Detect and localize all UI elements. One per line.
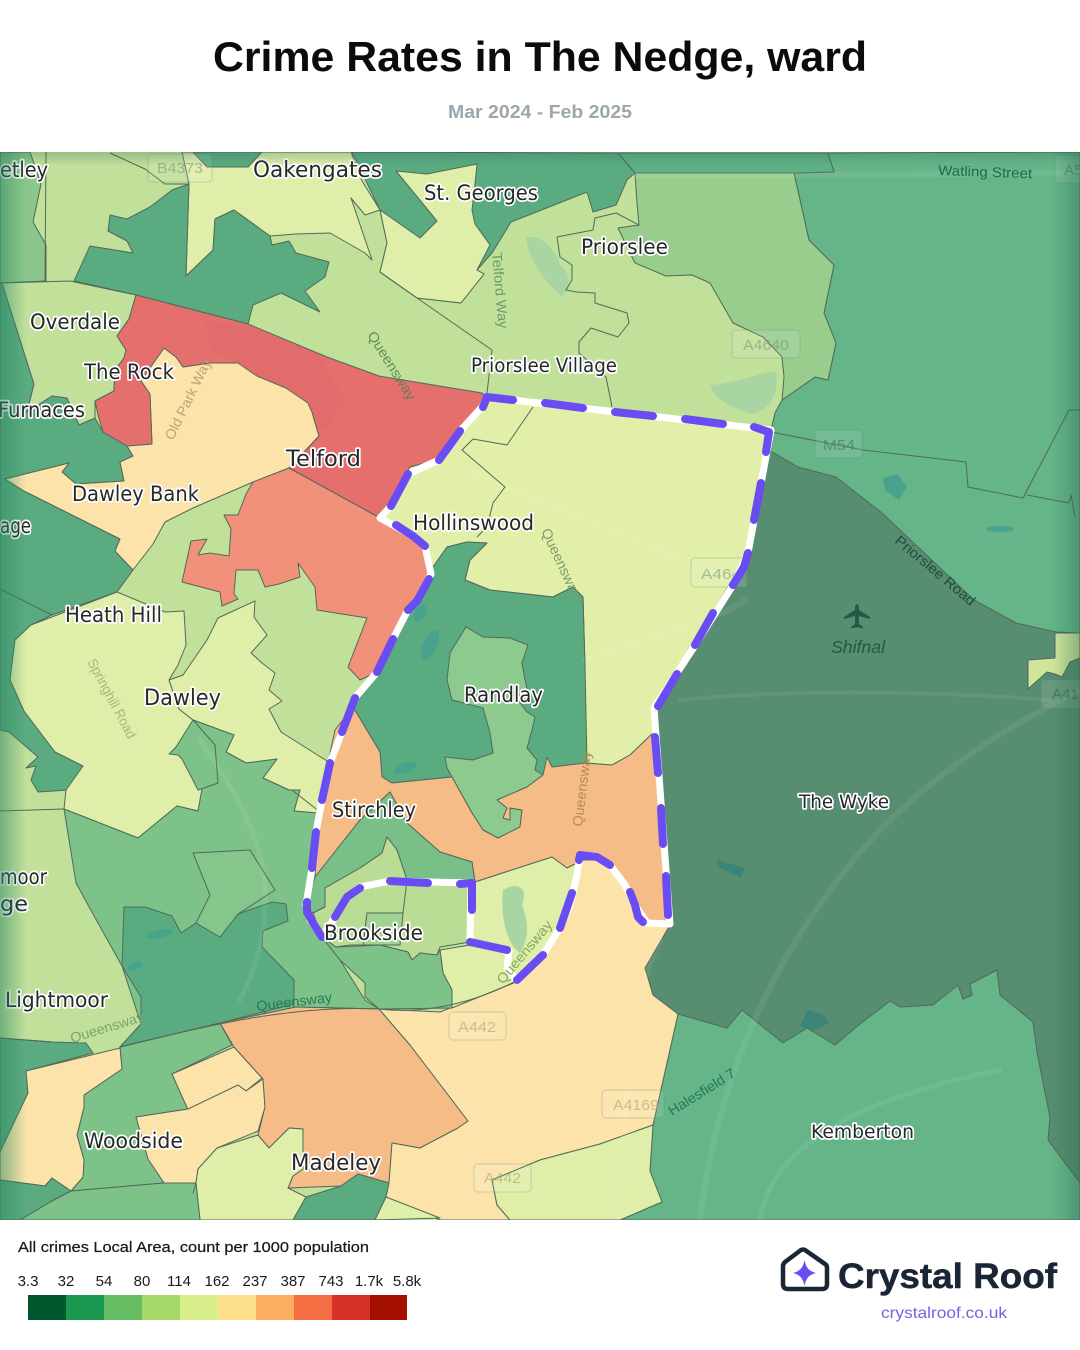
place names	[0, 158, 914, 1176]
place names: Overdale	[30, 310, 120, 334]
area: lower-left green	[0, 1038, 93, 1152]
place names: Lightmoor	[5, 988, 108, 1012]
area: The Wyke dark green	[645, 450, 1080, 1183]
legend colour scale	[28, 1295, 407, 1320]
legend values	[18, 1273, 422, 1290]
road shield labels: A41	[1052, 686, 1079, 703]
legend values: 80	[134, 1273, 150, 1290]
area: north dark-green St Georges	[352, 152, 635, 303]
area: top-left green strip	[0, 152, 46, 283]
place names: age	[0, 514, 31, 538]
road names: Old Park Way	[161, 356, 214, 442]
place names: Furnaces	[0, 398, 85, 422]
legend values: 32	[58, 1273, 74, 1290]
road shield labels: A4169	[613, 1097, 659, 1114]
place names: Hollinswood	[413, 511, 534, 535]
area: Madeley south dark green	[293, 1174, 389, 1220]
area: cream C	[136, 1079, 265, 1183]
place names: Dawley	[144, 685, 221, 711]
area: Dawley west yellow	[10, 592, 205, 838]
area: cream west	[0, 1048, 122, 1191]
legend values: 387	[280, 1273, 306, 1290]
place names: Brookside	[324, 921, 423, 945]
place names: ge	[0, 892, 28, 916]
area: Brookside small patch	[363, 913, 403, 945]
area: yellow patch near A41	[1028, 633, 1080, 689]
road network overlay	[180, 172, 1080, 1220]
road names: Watling Street	[938, 162, 1033, 181]
area: bottom-left greens	[20, 1183, 200, 1220]
road shield labels: B4373	[157, 160, 203, 177]
legend values: 237	[242, 1273, 268, 1290]
place names: etley	[0, 158, 48, 182]
area: Madeley orange	[220, 1007, 468, 1188]
lakes and water bodies	[502, 237, 777, 953]
road names: Queensway	[493, 917, 555, 987]
area: salmon Hollinswood west	[182, 468, 432, 680]
place names: Shifnal	[831, 637, 886, 657]
map edge vignette	[0, 152, 1080, 1220]
place names: Telford	[285, 446, 361, 472]
area: St Georges yellow	[380, 164, 490, 303]
road names: Priorslee Road	[892, 532, 979, 609]
area: red darker park	[237, 362, 313, 413]
place names: Stirchley	[332, 798, 416, 822]
area: Madeley south yellow	[196, 1128, 306, 1220]
area: Nedge south yellow	[440, 857, 577, 1008]
area: Randlay green	[353, 542, 587, 783]
road shield labels: A464	[701, 566, 741, 583]
legend values: 743	[318, 1273, 344, 1290]
legend values: 5.8k	[393, 1273, 422, 1290]
legend	[18, 1239, 422, 1320]
area: cream B	[172, 1047, 262, 1112]
area: Brookside pale green	[313, 837, 472, 960]
ward boundary: white outline	[306, 397, 771, 981]
ward boundary: purple dashes	[307, 397, 769, 980]
area: Dawley east yellow	[169, 601, 327, 813]
choropleth map	[0, 152, 1080, 1220]
road names: Queensway	[364, 328, 419, 403]
road names: Queensway	[569, 750, 594, 827]
area: Woodside mid green	[71, 1023, 232, 1191]
teal ponds	[126, 474, 1014, 1031]
area: south of Brookside green	[322, 937, 452, 1009]
place names: Priorslee	[581, 235, 668, 259]
area: top small green	[193, 152, 262, 167]
area: red Telford town centre	[95, 295, 487, 518]
area: south cream	[379, 860, 678, 1220]
road names: Springhill Road	[84, 656, 140, 741]
area: bottom yellow right	[492, 1125, 662, 1220]
area: Randlay lighter patch	[445, 627, 543, 838]
boundary lines	[0, 152, 1080, 1193]
road names: Queensway	[68, 1008, 146, 1046]
legend values: 1.7k	[355, 1273, 384, 1290]
logo: Crystal Roof	[783, 1250, 1057, 1322]
area: Hollinswood / Nedge yellow	[380, 397, 771, 765]
place names: The Wyke	[798, 791, 889, 813]
road names: Telford Way	[489, 252, 512, 329]
legend values: 54	[96, 1273, 112, 1290]
place names: Madeley	[291, 1150, 381, 1176]
wordmark: Crystal Roof	[838, 1257, 1057, 1296]
road shield labels: A442	[458, 1019, 496, 1036]
place names: Kemberton	[811, 1121, 914, 1143]
place names: moor	[0, 865, 47, 889]
icon: airport plane	[844, 604, 870, 628]
road shield labels: M54	[823, 437, 855, 454]
title: Crime Rates in The Nedge, ward	[213, 33, 867, 80]
area: eastern green farmland	[620, 152, 1080, 1220]
area: Priorslee east	[618, 173, 836, 400]
website: crystalroof.co.uk	[881, 1305, 1008, 1322]
road shield labels: A4640	[743, 337, 789, 354]
legend values: 114	[167, 1273, 191, 1290]
place names: The Rock	[83, 360, 175, 384]
legend values: 3.3	[18, 1273, 38, 1290]
area: mid green inner patch	[193, 850, 275, 937]
area: Dawley Bank cream	[5, 348, 319, 570]
area: bottom cream-yellow centre	[375, 1197, 440, 1220]
place names: Randlay	[464, 683, 543, 707]
area: bottom-left dark	[0, 1178, 71, 1220]
road shield labels: A442	[484, 1170, 521, 1187]
area: north strip	[618, 153, 834, 173]
road names	[68, 162, 1033, 1119]
legend title: All crimes Local Area, count per 1000 population	[18, 1239, 369, 1256]
area: south-west mid green	[64, 720, 379, 1047]
road names: Queensway	[255, 989, 333, 1014]
area: Overdale	[2, 281, 136, 425]
subtitle: date range: Mar 2024 - Feb 2025	[448, 101, 632, 122]
icon: house outline with star	[783, 1250, 827, 1289]
road names: Halesfield 7	[665, 1065, 738, 1119]
area: north-west dark green	[74, 184, 329, 324]
area: Stirchley orange	[315, 707, 672, 923]
area: Lightmoor east dark green	[120, 902, 294, 1047]
place names: St. Georges	[424, 181, 538, 205]
road names: Queensway	[538, 526, 585, 601]
road shields	[148, 154, 1080, 1192]
legend values: 162	[204, 1273, 230, 1290]
area: Oakengates yellow	[182, 152, 380, 276]
place names: Dawley Bank	[72, 482, 200, 506]
place names: Woodside	[84, 1129, 183, 1153]
area: green finger by Dawley	[169, 720, 218, 790]
area: west dark green	[0, 283, 133, 792]
area: south of Stirchley green	[305, 792, 475, 913]
place names: Priorslee Village	[471, 354, 617, 377]
place names: Oakengates	[253, 158, 382, 183]
road shield labels	[157, 160, 1080, 1187]
place names: Heath Hill	[65, 603, 162, 627]
